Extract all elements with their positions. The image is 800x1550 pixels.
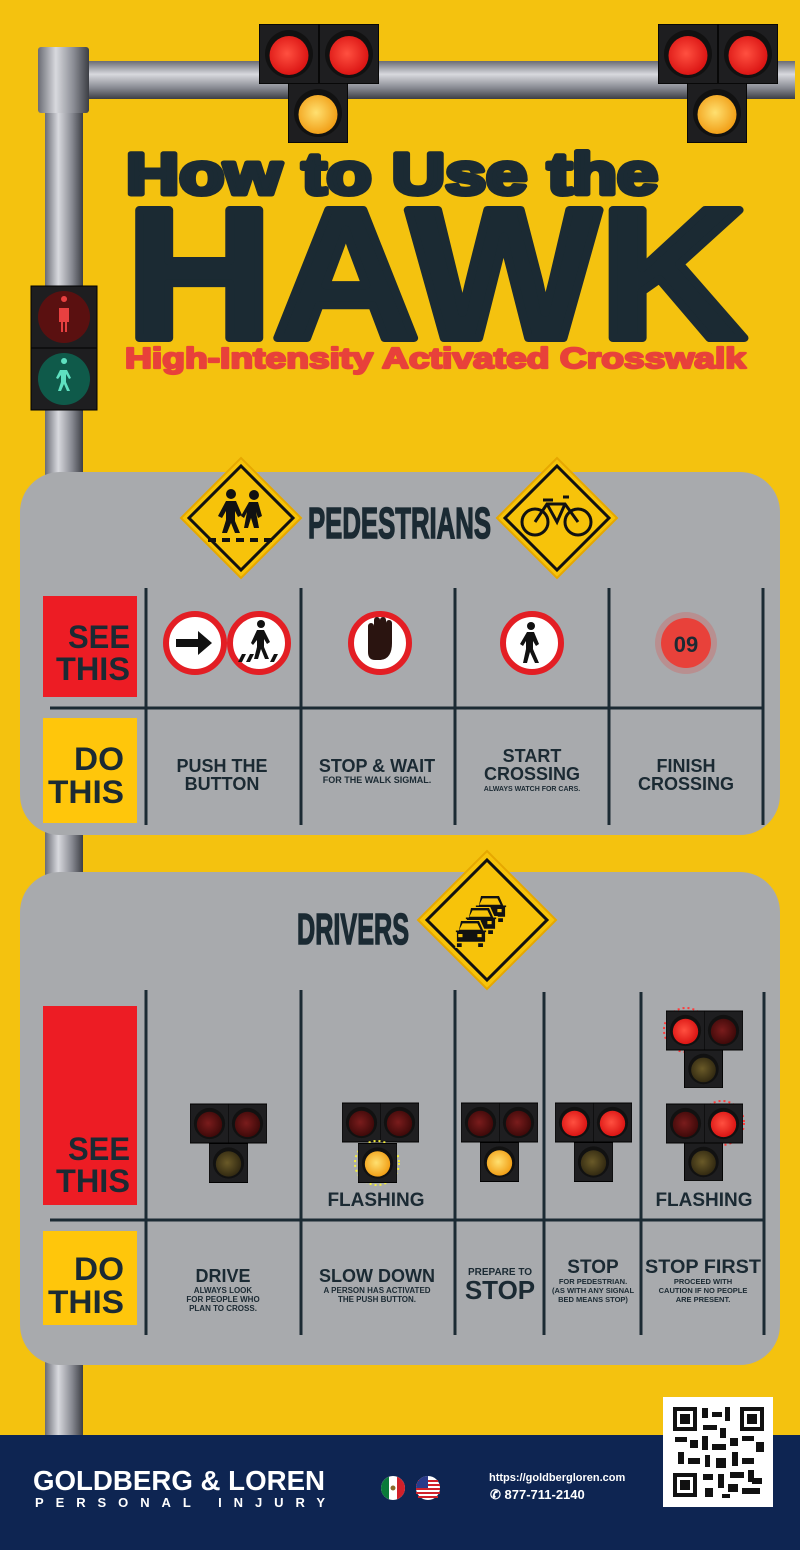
text: slow down: SLOW DOWN [319, 1266, 435, 1286]
signal: alternating flashing red [664, 1008, 744, 1181]
text: stop first: ARE PRESENT. [676, 1295, 730, 1304]
icon: countdown 09: 09 [674, 632, 698, 657]
text: stop first: CAUTION IF NO PEOPLE [659, 1286, 747, 1295]
icon: arrow and push button signs [166, 614, 288, 672]
qr code [663, 1397, 773, 1507]
label: do this: THIS [48, 774, 124, 810]
text: slow down: THE PUSH BUTTON. [338, 1295, 416, 1304]
text: slow down [319, 1266, 435, 1304]
text: finish crossing [638, 756, 734, 794]
text: stop first: PROCEED WITH [674, 1277, 732, 1286]
text: push the button: BUTTON [185, 774, 259, 794]
text: stop first: STOP FIRST [645, 1257, 761, 1278]
logo: GOLDBERG & LOREN [33, 1465, 325, 1496]
text: drive: FOR PEOPLE WHO [186, 1295, 260, 1304]
icon: walking person [503, 614, 561, 672]
logo [33, 1465, 325, 1510]
icon: bicycle sign [497, 458, 617, 578]
text: prepare to stop: PREPARE TO [468, 1267, 532, 1278]
grid lines [50, 990, 764, 1335]
overhead signal right [658, 24, 778, 143]
text: push the button: PUSH THE [176, 756, 268, 776]
text: push the button [176, 756, 268, 794]
text: drive: ALWAYS LOOK [194, 1286, 252, 1295]
label: see this [43, 596, 137, 697]
label: do this: DO [74, 741, 124, 777]
footer [0, 1397, 800, 1550]
logo: PERSONAL INJURY [35, 1495, 325, 1510]
icon: flags [381, 1476, 440, 1500]
label: do this [43, 718, 137, 823]
text: slow down: A PERSON HAS ACTIVATED [323, 1286, 431, 1295]
text: flashing: FLASHING [655, 1190, 753, 1211]
text: stop: (AS WITH ANY SIGNAL [552, 1286, 634, 1295]
icon: pedestrian crossing sign [181, 458, 301, 578]
icon: hand stop [351, 614, 409, 672]
label: see this: THIS [56, 1163, 130, 1199]
contact: https://goldbergloren.com [489, 1472, 625, 1484]
label: see this: SEE [68, 1131, 130, 1167]
title: High-Intensity Activated Crosswalk [125, 343, 747, 375]
label: do this [43, 1231, 137, 1325]
pedestrian signal on pole [31, 286, 97, 410]
icon: cars sign [418, 851, 556, 989]
title: How to Use the [126, 142, 658, 207]
signal: steady red [555, 1103, 632, 1182]
label: see this: THIS [56, 651, 130, 687]
text: drive [186, 1266, 260, 1313]
label: do this: THIS [48, 1284, 124, 1320]
text: drive: DRIVE [195, 1266, 251, 1286]
text: stop: FOR PEDESTRIAN. [559, 1277, 627, 1286]
text: start crossing: ALWAYS WATCH FOR CARS. [484, 786, 580, 793]
label: do this: DO [74, 1251, 124, 1287]
text: start crossing: START [503, 746, 561, 766]
title: HAWK [126, 171, 746, 378]
icon: countdown 09 [655, 612, 717, 674]
text: stop: STOP [567, 1257, 619, 1278]
overhead signal left [259, 24, 379, 143]
text: stop & wait [319, 756, 435, 785]
signal: dark [190, 1104, 267, 1182]
text: stop first [645, 1257, 761, 1304]
signal: flashing yellow [342, 1103, 419, 1185]
text: stop & wait: FOR THE WALK SIGMAL. [323, 775, 431, 785]
panel: pedestrians [20, 458, 780, 835]
text: drive: PLAN TO CROSS. [189, 1304, 257, 1313]
label: see this [43, 1006, 137, 1205]
contact: ✆ 877-711-2140 [490, 1487, 585, 1502]
label: see this: SEE [68, 619, 130, 655]
text: stop & wait: STOP & WAIT [319, 756, 435, 776]
text: flashing: FLASHING [327, 1190, 425, 1211]
heading: drivers: DRIVERS [297, 905, 409, 954]
panel: drivers [20, 851, 780, 1365]
text: start crossing: CROSSING [484, 764, 580, 784]
contact [489, 1472, 625, 1502]
text: stop: BED MEANS STOP) [558, 1295, 628, 1304]
signal: steady yellow [461, 1103, 538, 1182]
text: finish crossing: CROSSING [638, 774, 734, 794]
grid lines [50, 588, 763, 825]
heading: pedestrians: PEDESTRIANS [308, 499, 491, 548]
text: start crossing [484, 746, 580, 793]
text: finish crossing: FINISH [656, 756, 716, 776]
text: stop [552, 1257, 634, 1304]
text: prepare to stop: STOP [465, 1275, 535, 1305]
